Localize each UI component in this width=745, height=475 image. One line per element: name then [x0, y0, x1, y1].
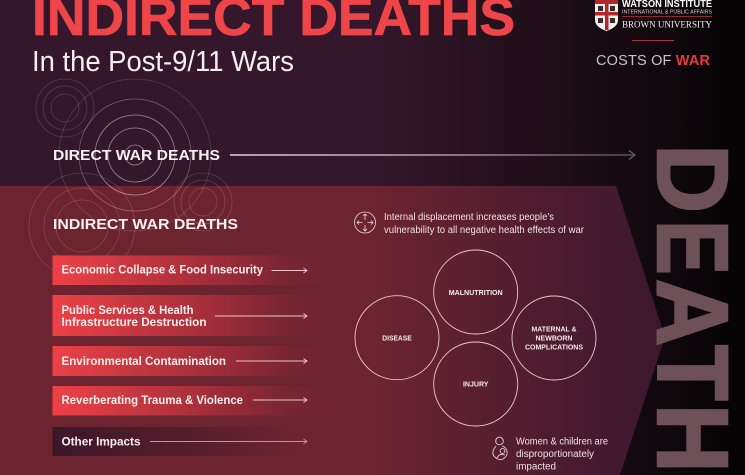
bar: public services: Public Services & Health [62, 305, 194, 317]
icon: displacement arrows [354, 212, 376, 233]
circle: disease: DISEASE [382, 334, 412, 342]
circle: maternal and newborn complications: COMPLICATIONS [525, 342, 583, 352]
bar: reverberating trauma [52, 386, 332, 416]
big vertical word: DEATH: H [636, 404, 745, 473]
circle: maternal and newborn complications: MATERNAL & [532, 324, 577, 334]
big vertical word: DEATH [636, 144, 745, 473]
decorative concentric rings [29, 79, 232, 279]
heading: indirect war deaths: INDIRECT WAR DEATHS [53, 217, 238, 233]
diagram: health outcomes circles [355, 250, 596, 426]
bar: economic collapse [52, 256, 332, 285]
circle: injury [434, 342, 518, 426]
bar: economic collapse: Economic Collapse & Food Insecurity [62, 264, 264, 276]
bar: environmental contamination [52, 346, 332, 376]
logo text: International and Public Affairs: INTERNATIONAL & PUBLIC AFFAIRS [622, 10, 713, 16]
text: internal displacement note: vulnerability to all negative health effects of war [384, 225, 585, 236]
circle: maternal and newborn complications: NEWBORN [536, 334, 572, 342]
circle: malnutrition: MALNUTRITION [449, 288, 503, 297]
text: women and children note: Women & children are [516, 436, 608, 448]
text: women and children note [516, 436, 608, 472]
heading: direct war deaths: DIRECT WAR DEATHS [53, 148, 220, 164]
bar: public services: Infrastructure Destruction [62, 317, 206, 329]
logo: Watson Institute, Brown University [595, 0, 713, 31]
subtitle: In the Post-9/11 Wars [32, 46, 294, 78]
text: women and children note: impacted [516, 462, 556, 472]
circle: disease [355, 296, 439, 380]
logo: Costs of War: COSTS OF WAR [596, 53, 711, 69]
icon: woman and child [493, 437, 507, 460]
logo text: Brown University: BROWN UNIVERSITY [622, 20, 712, 30]
arrow: direct deaths to death [230, 150, 635, 160]
text: internal displacement note [384, 212, 585, 236]
big vertical word: DEATH: T [636, 345, 745, 401]
big vertical word: DEATH: D [636, 144, 745, 213]
big vertical word: DEATH: E [636, 220, 745, 275]
circle: maternal and newborn complications [512, 296, 596, 380]
circle: malnutrition [434, 250, 518, 334]
text: women and children note: disproportionately [516, 449, 594, 460]
bar: other impacts [52, 427, 314, 456]
icon: Brown shield [595, 0, 618, 31]
panel: indirect deaths arrow [0, 186, 665, 475]
text: internal displacement note: Internal displacement increases people’s [384, 212, 554, 223]
bar: reverberating trauma: Reverberating Trauma & Violence [62, 395, 243, 407]
circle: injury: INJURY [463, 380, 488, 388]
bar: other impacts: Other Impacts [62, 436, 140, 448]
bar: environmental contamination: Environmental Contamination [62, 356, 226, 368]
big vertical word: DEATH: A [636, 279, 745, 346]
bar: public services [52, 295, 332, 336]
